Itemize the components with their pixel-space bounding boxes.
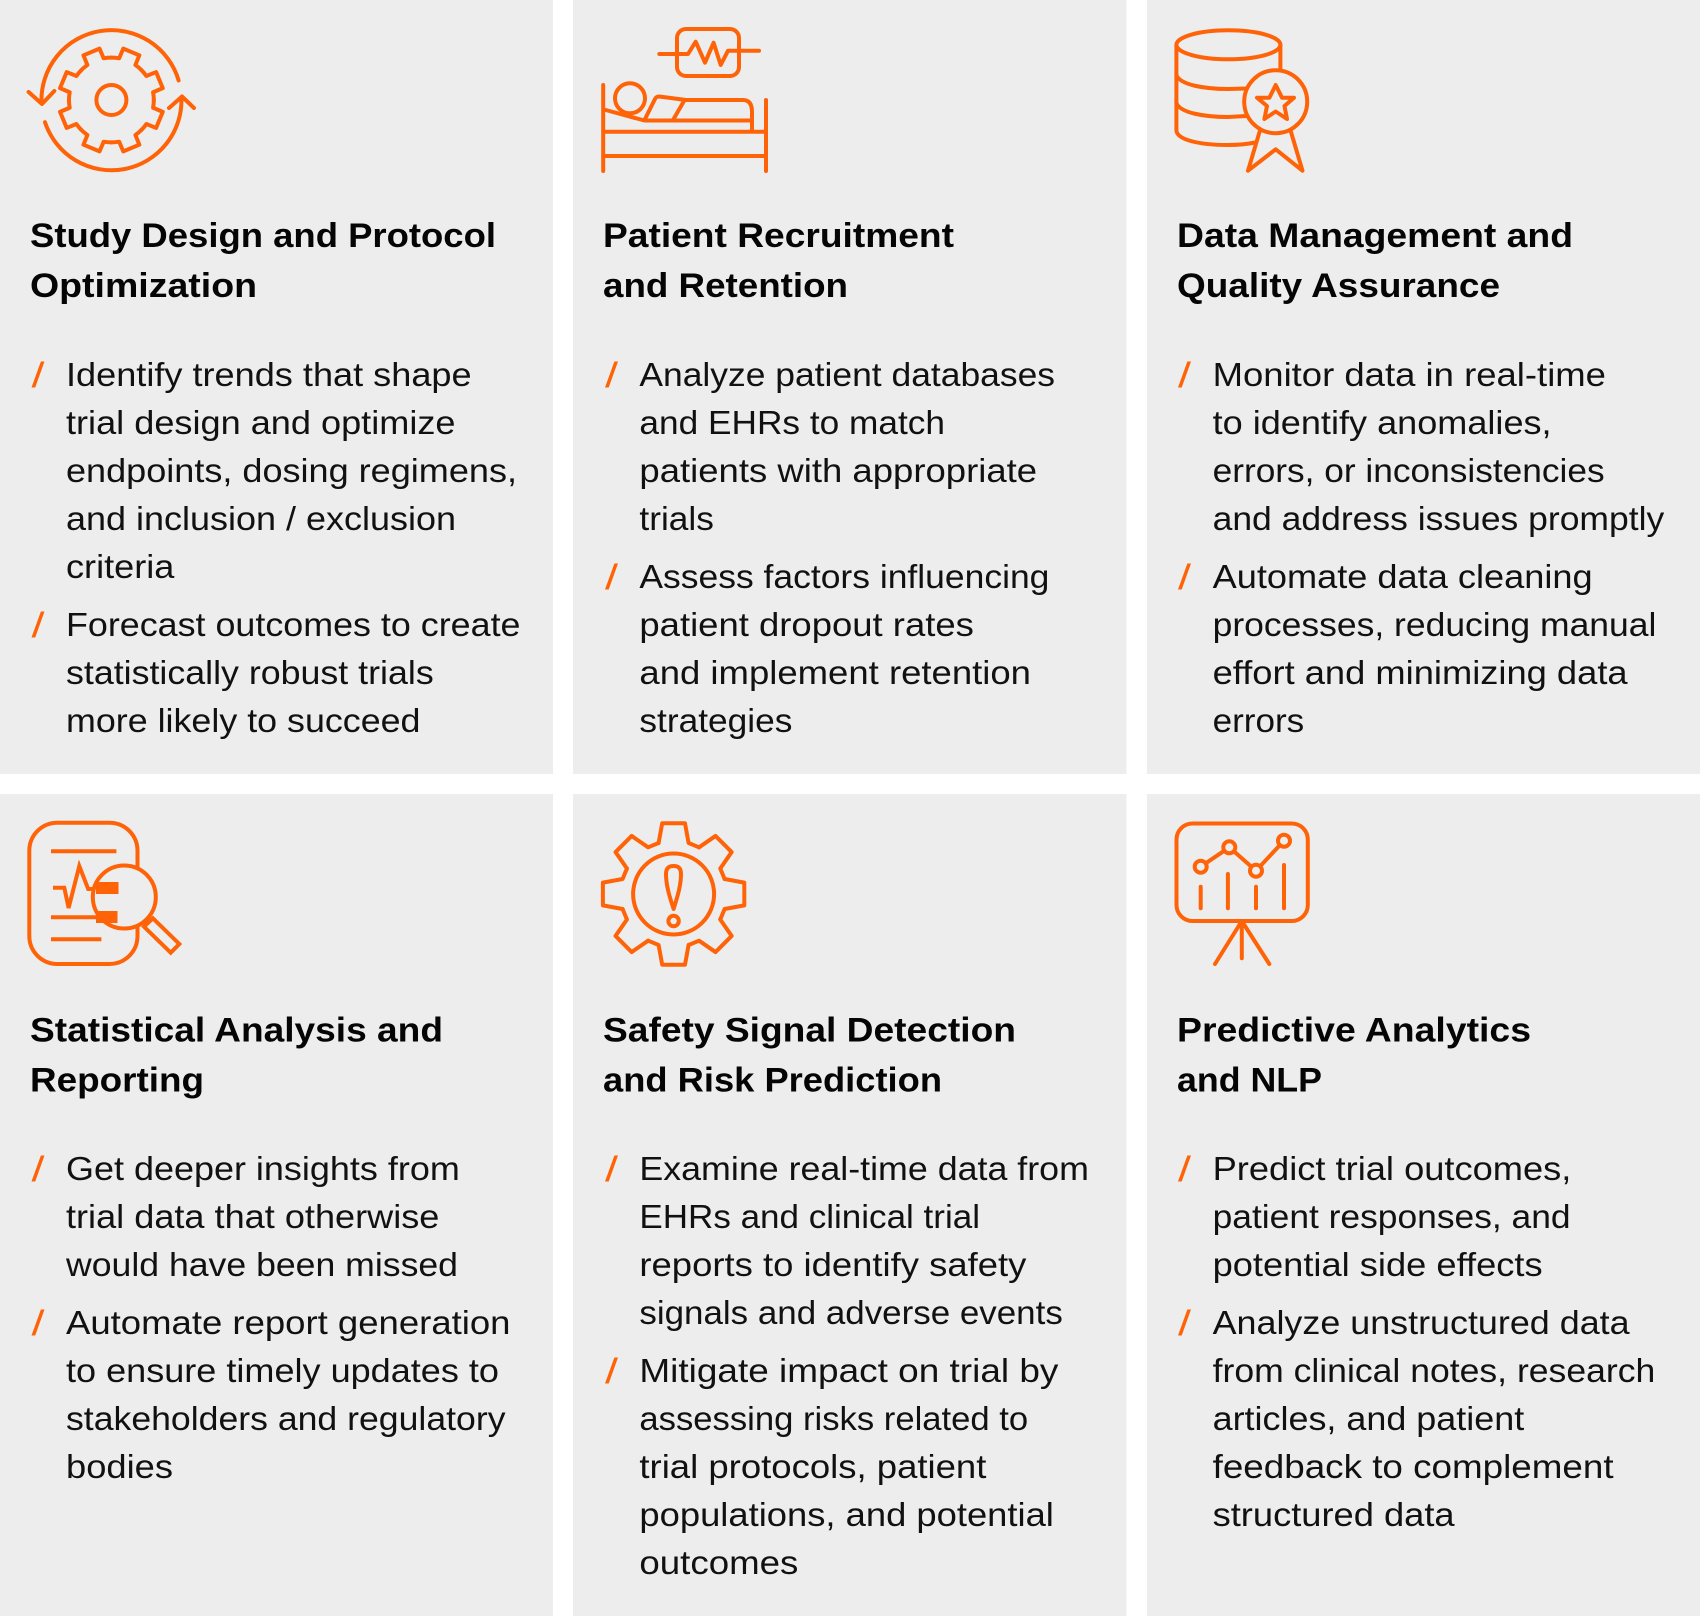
bullet: monitor data: Monitor data in real-time bbox=[1213, 356, 1606, 393]
bullet: mitigate impact bbox=[605, 1352, 1059, 1581]
bullet: analyze patient databases: and EHRs to match bbox=[639, 404, 945, 441]
bullet: identify trends: trial design and optimize bbox=[66, 404, 456, 441]
bullet: examine real-time data: signals and adverse events bbox=[639, 1294, 1063, 1331]
bullet: get deeper insights: Get deeper insights from bbox=[66, 1150, 460, 1187]
bullet: examine real-time data: reports to identify safety bbox=[639, 1246, 1027, 1283]
bullet: monitor data bbox=[1178, 356, 1665, 537]
bullet: forecast outcomes bbox=[32, 606, 520, 739]
bullet: automate report generation bbox=[32, 1304, 510, 1485]
bullet: analyze unstructured data bbox=[1178, 1304, 1655, 1533]
bullet: automate report generation: / bbox=[32, 1304, 45, 1343]
icon: patient in bed with heart monitor bbox=[603, 29, 766, 171]
bullet: examine real-time data: Examine real-time data from bbox=[639, 1150, 1089, 1187]
heading: study design: Optimization bbox=[30, 267, 257, 305]
bullet: mitigate impact: trial protocols, patient bbox=[639, 1448, 986, 1485]
heading: safety signal: Safety Signal Detection bbox=[603, 1012, 1016, 1050]
heading: study design bbox=[30, 217, 496, 305]
bullet: monitor data: to identify anomalies, bbox=[1213, 404, 1552, 441]
bullet: predict trial outcomes: potential side effects bbox=[1213, 1246, 1543, 1283]
bullet: analyze unstructured data: feedback to complement bbox=[1213, 1448, 1614, 1485]
bullet: assess factors: / bbox=[605, 558, 618, 597]
bullet: automate data cleaning: / bbox=[1178, 558, 1191, 597]
heading: safety signal: and Risk Prediction bbox=[603, 1062, 942, 1100]
bullet: automate report generation: to ensure timely updates to bbox=[66, 1352, 499, 1389]
bullet: analyze unstructured data: from clinical notes, research bbox=[1213, 1352, 1655, 1389]
heading: predictive analytics: and NLP bbox=[1177, 1062, 1322, 1100]
bullet: assess factors: Assess factors influencing bbox=[639, 558, 1049, 595]
bullet: predict trial outcomes bbox=[1178, 1150, 1571, 1283]
bullet: monitor data: and address issues promptly bbox=[1213, 500, 1665, 537]
bullet: monitor data: / bbox=[1178, 356, 1191, 395]
bullet: predict trial outcomes: Predict trial outcomes, bbox=[1213, 1150, 1571, 1187]
bullet: get deeper insights bbox=[32, 1150, 460, 1283]
bullet: predict trial outcomes: patient responses, and bbox=[1213, 1198, 1571, 1235]
bullet: automate report generation: stakeholders and regulatory bbox=[66, 1400, 506, 1437]
heading: statistical analysis bbox=[30, 1012, 443, 1100]
bullet: analyze patient databases: Analyze patient databases bbox=[639, 356, 1055, 393]
heading: patient recruitment: Patient Recruitment bbox=[603, 217, 954, 255]
bullet: automate data cleaning: Automate data cleaning bbox=[1213, 558, 1593, 595]
heading: safety signal bbox=[603, 1012, 1016, 1100]
bullet: analyze unstructured data: / bbox=[1178, 1304, 1191, 1343]
bullet: assess factors: and implement retention bbox=[639, 654, 1031, 691]
heading: data management: Data Management and bbox=[1177, 217, 1573, 255]
bullet: automate report generation: bodies bbox=[66, 1448, 173, 1485]
bullet: analyze patient databases bbox=[605, 356, 1055, 537]
bullet: analyze patient databases: trials bbox=[639, 500, 714, 537]
panel: predictive analytics and nlp bbox=[1147, 794, 1700, 1616]
bullet: assess factors: patient dropout rates bbox=[639, 606, 974, 643]
bullet: automate data cleaning: errors bbox=[1213, 702, 1304, 739]
bullet: examine real-time data: EHRs and clinical trial bbox=[639, 1198, 980, 1235]
bullet: assess factors: strategies bbox=[639, 702, 792, 739]
bullet: identify trends: endpoints, dosing regimens, bbox=[66, 452, 517, 489]
bullet: analyze patient databases: patients with appropriate bbox=[639, 452, 1037, 489]
bullet: identify trends: criteria bbox=[66, 548, 175, 585]
bullet: identify trends: Identify trends that shape bbox=[66, 356, 472, 393]
bullet: mitigate impact: assessing risks related to bbox=[639, 1400, 1028, 1437]
heading: patient recruitment: and Retention bbox=[603, 267, 848, 305]
bullet: automate data cleaning: effort and minimizing data bbox=[1213, 654, 1628, 691]
panel: study design and protocol optimization bbox=[0, 0, 553, 774]
bullet: predict trial outcomes: / bbox=[1178, 1150, 1191, 1189]
heading: statistical analysis: Reporting bbox=[30, 1062, 204, 1100]
panel: patient recruitment and retention bbox=[573, 0, 1126, 774]
bullet: mitigate impact: populations, and potential bbox=[639, 1496, 1054, 1533]
heading: data management: Quality Assurance bbox=[1177, 267, 1500, 305]
icon: presentation board with line chart bbox=[1176, 824, 1308, 964]
bullet: mitigate impact: outcomes bbox=[639, 1544, 798, 1581]
panel: data management and quality assurance bbox=[1147, 0, 1700, 774]
heading: data management bbox=[1177, 217, 1573, 305]
bullet: analyze unstructured data: Analyze unstructured data bbox=[1213, 1304, 1630, 1341]
icon: gear with circular arrows bbox=[29, 30, 194, 170]
heading: predictive analytics bbox=[1177, 1012, 1531, 1100]
bullet: identify trends: and inclusion / exclusion bbox=[66, 500, 456, 537]
bullet: monitor data: errors, or inconsistencies bbox=[1213, 452, 1605, 489]
icon: database with award ribbon bbox=[1176, 30, 1307, 171]
bullet: examine real-time data: / bbox=[605, 1150, 618, 1189]
bullet: get deeper insights: would have been missed bbox=[65, 1246, 458, 1283]
heading: statistical analysis: Statistical Analysis and bbox=[30, 1012, 443, 1050]
bullet: forecast outcomes: Forecast outcomes to create bbox=[66, 606, 520, 643]
bullet: assess factors bbox=[605, 558, 1049, 739]
bullet: identify trends bbox=[32, 356, 517, 585]
icon: gear with exclamation mark bbox=[603, 823, 744, 965]
bullet: forecast outcomes: statistically robust trials bbox=[66, 654, 434, 691]
bullet: mitigate impact: / bbox=[605, 1352, 618, 1391]
bullet: mitigate impact: Mitigate impact on trial by bbox=[639, 1352, 1059, 1389]
bullet: analyze unstructured data: articles, and patient bbox=[1213, 1400, 1524, 1437]
bullet: automate data cleaning: processes, reducing manual bbox=[1213, 606, 1656, 643]
heading: patient recruitment bbox=[603, 217, 954, 305]
bullet: automate report generation: Automate report generation bbox=[66, 1304, 510, 1341]
bullet: get deeper insights: / bbox=[32, 1150, 45, 1189]
icon: report with magnifying glass bbox=[29, 823, 179, 964]
bullet: identify trends: / bbox=[32, 356, 45, 395]
bullet: automate data cleaning bbox=[1178, 558, 1656, 739]
bullet: examine real-time data bbox=[605, 1150, 1089, 1331]
panel: safety signal detection and risk prediction bbox=[573, 794, 1126, 1616]
heading: predictive analytics: Predictive Analytics bbox=[1177, 1012, 1531, 1050]
bullet: analyze unstructured data: structured data bbox=[1213, 1496, 1455, 1533]
bullet: forecast outcomes: / bbox=[32, 606, 45, 645]
bullet: analyze patient databases: / bbox=[605, 356, 618, 395]
bullet: forecast outcomes: more likely to succeed bbox=[66, 702, 420, 739]
panel: statistical analysis and reporting bbox=[0, 794, 553, 1616]
bullet: get deeper insights: trial data that otherwise bbox=[66, 1198, 439, 1235]
heading: study design: Study Design and Protocol bbox=[30, 217, 496, 255]
